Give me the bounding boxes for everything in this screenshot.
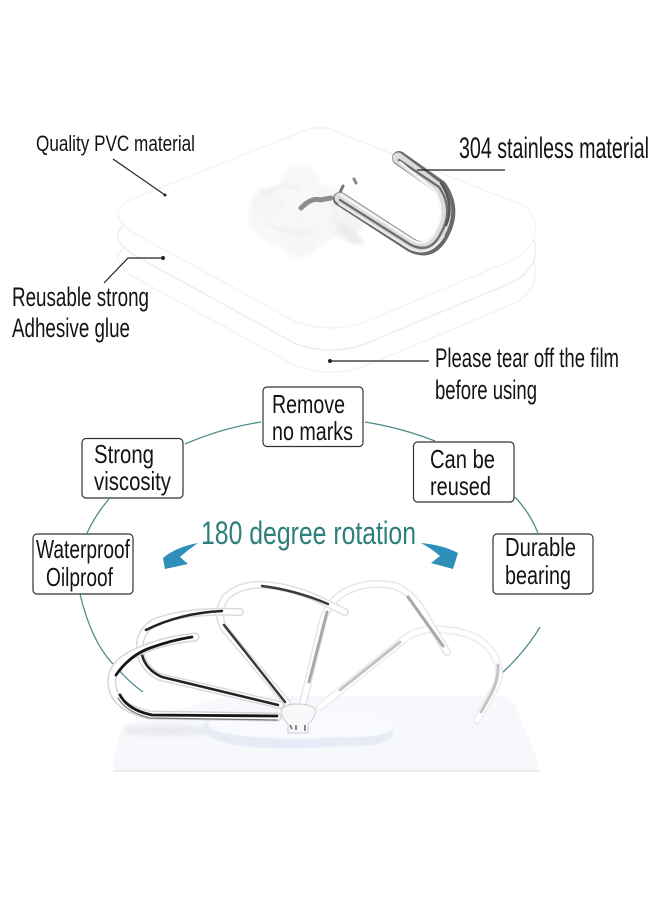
feature box: Durable bearing: [493, 532, 593, 594]
feature box: Waterproof Oilproof: Oilproof: [46, 562, 114, 592]
second pad layer: [118, 150, 535, 350]
label: Please tear off the film before using: [328, 343, 619, 405]
feature box: Remove no marks: Remove: [272, 389, 345, 419]
arrow: rotate left: [163, 543, 198, 569]
clear flower base: [203, 713, 393, 748]
heading: 180 degree rotation: 180 degree rotation: [201, 515, 416, 551]
icon: stainless steel hook: [301, 158, 450, 252]
feature box: Can be reused: [414, 442, 514, 502]
arrow: rotate right: [421, 543, 458, 569]
feature box: Remove no marks: no marks: [272, 416, 353, 446]
clear flower base: [248, 165, 365, 258]
label: Quality PVC material: Quality PVC material: [36, 131, 195, 156]
panel: stacked adhesive pads with hook: [118, 128, 535, 372]
label: Reusable strong Adhesive glue: Reusable strong: [12, 282, 149, 312]
label: Reusable strong Adhesive glue: Adhesive glue: [12, 313, 130, 343]
third pad layer: [118, 172, 535, 372]
hook 4: [303, 584, 447, 703]
base shadow: [125, 725, 205, 736]
feature box: Waterproof Oilproof: [33, 534, 133, 594]
hook 1: darkest: [112, 637, 277, 720]
feature box: Strong viscosity: [82, 438, 183, 498]
circular connector arcs: [80, 422, 540, 692]
panel: hook rotation demonstration: [112, 584, 540, 772]
label: Please tear off the film before using: before using: [435, 375, 537, 405]
top pad layer: [118, 128, 535, 328]
feature box: Remove no marks: [263, 387, 363, 446]
feature box: Strong viscosity: viscosity: [94, 466, 171, 496]
label: Reusable strong Adhesive glue: [12, 256, 165, 343]
feature box: Can be reused: reused: [430, 471, 491, 501]
clear base sheet: [113, 696, 538, 772]
feature box: Durable bearing: Durable: [505, 532, 576, 562]
feature box: Can be reused: Can be: [430, 444, 495, 474]
feature box: Waterproof Oilproof: Waterproof: [36, 534, 131, 564]
feature box: Strong viscosity: Strong: [94, 439, 154, 469]
feature box: Durable bearing: bearing: [505, 560, 571, 590]
label: Quality PVC material: [36, 131, 195, 196]
hook 3: [220, 585, 345, 703]
hook pivot: [281, 704, 316, 733]
hook 2: [140, 611, 280, 705]
hook 5: faintest: [320, 629, 499, 720]
